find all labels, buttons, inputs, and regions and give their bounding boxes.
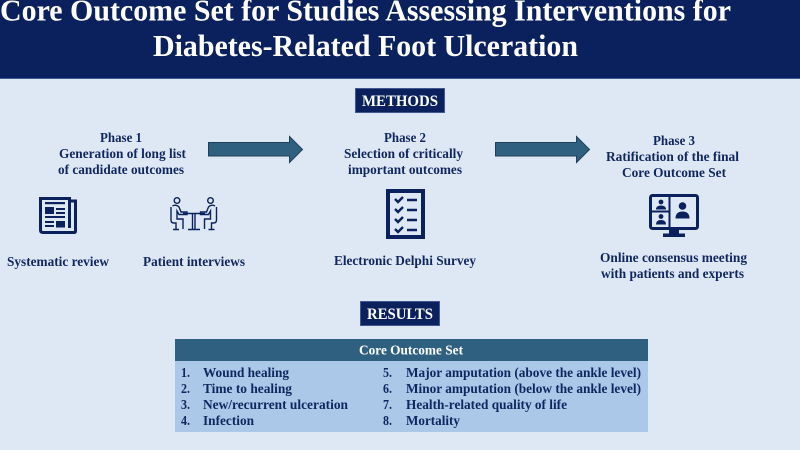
table header: Core Outcome Set xyxy=(359,342,463,358)
label: patient interviews: Patient interviews xyxy=(143,254,245,269)
table body: Infection xyxy=(203,413,254,428)
methods heading: METHODS xyxy=(362,93,438,110)
table body: Major amputation (above the ankle level) xyxy=(406,365,641,380)
methods heading xyxy=(356,88,444,112)
phase 1 heading: of candidate outcomes xyxy=(58,162,184,177)
table body: Mortality xyxy=(406,413,460,428)
label: online consensus meeting xyxy=(600,250,747,281)
arrow: phase 2 to phase 3 xyxy=(496,136,590,162)
table body: 3. xyxy=(181,397,190,412)
title banner: Diabetes-Related Foot Ulceration xyxy=(153,28,578,63)
phase 3 heading xyxy=(606,133,739,180)
icon: video call monitor xyxy=(650,195,698,237)
label: systematic review: Systematic review xyxy=(7,254,109,269)
table body: Time to healing xyxy=(203,381,292,396)
phase 3 heading: Ratification of the final xyxy=(606,149,739,164)
icon: checklist xyxy=(388,191,423,237)
phase 2 heading xyxy=(344,130,463,177)
label: online consensus meeting: with patients and experts xyxy=(601,266,744,281)
phase 3 heading: Phase 3 xyxy=(653,133,695,148)
panel: core outcome set table xyxy=(175,339,648,432)
results heading xyxy=(360,302,440,326)
table body: 6. xyxy=(383,381,392,396)
phase 1 heading xyxy=(58,130,186,177)
results heading: RESULTS xyxy=(367,306,433,323)
table body: 4. xyxy=(181,413,190,428)
phase 3 heading: Core Outcome Set xyxy=(622,165,726,180)
table body: Minor amputation (below the ankle level) xyxy=(406,381,641,396)
table body: Wound healing xyxy=(203,365,289,380)
phase 1 heading: Phase 1 xyxy=(100,130,142,145)
table body: 8. xyxy=(383,413,392,428)
phase 1 heading: Generation of long list xyxy=(59,146,186,161)
table body: Health-related quality of life xyxy=(406,397,567,412)
icon: patient interview xyxy=(171,198,216,230)
phase 2 heading: important outcomes xyxy=(348,162,462,177)
table body: New/recurrent ulceration xyxy=(203,397,348,412)
table body: 5. xyxy=(383,365,392,380)
label: online consensus meeting: Online consensus meeting xyxy=(600,250,747,265)
table body xyxy=(175,361,648,432)
icon: newspaper xyxy=(40,198,76,232)
table body: 1. xyxy=(181,365,190,380)
table body: 7. xyxy=(383,397,392,412)
arrow: phase 1 to phase 2 xyxy=(208,136,302,162)
table header xyxy=(175,339,648,361)
phase 2 heading: Phase 2 xyxy=(384,130,426,145)
title banner xyxy=(0,0,800,79)
table body: 2. xyxy=(181,381,190,396)
label: electronic delphi survey: Electronic Delphi Survey xyxy=(334,253,476,268)
phase 2 heading: Selection of critically xyxy=(344,146,463,161)
